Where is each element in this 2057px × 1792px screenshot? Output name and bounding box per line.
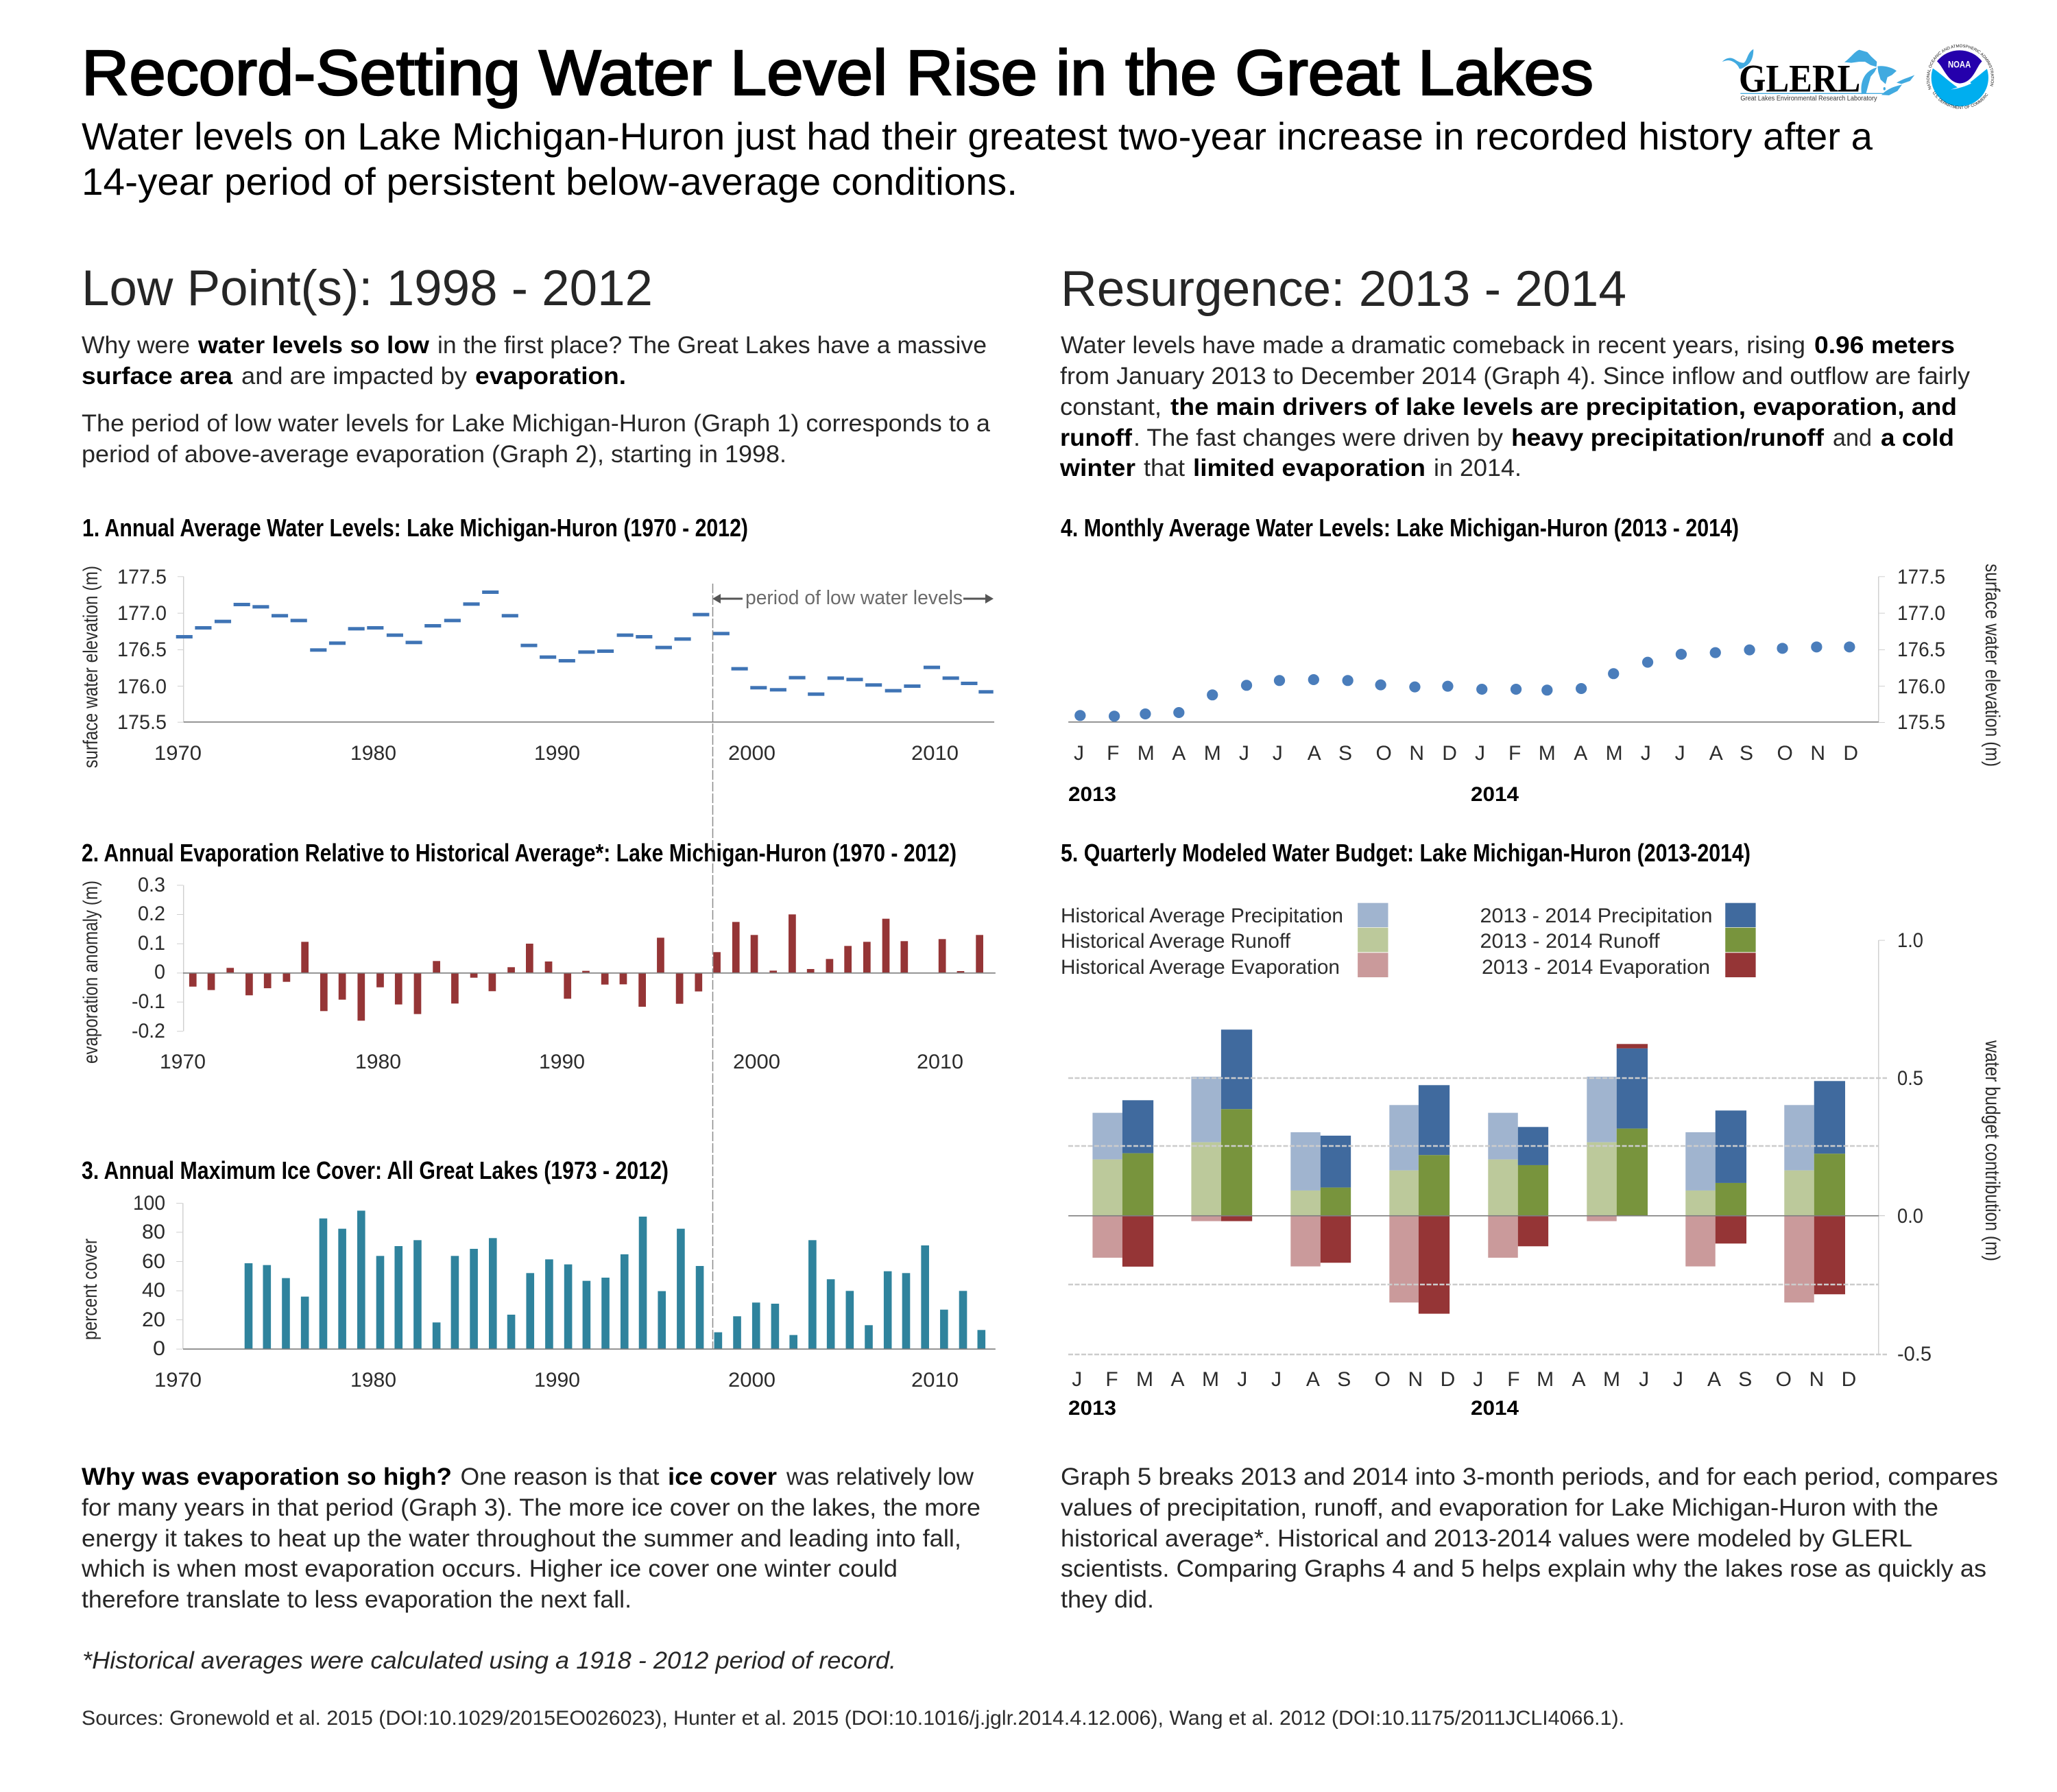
month labels 4: N xyxy=(1409,742,1424,765)
y axis labels 5: 0.5 xyxy=(1897,1067,1923,1090)
y axis labels 2: 0.2 xyxy=(138,903,165,925)
y axis labels 3: 40 xyxy=(142,1279,165,1302)
legend: 2013 - 2014 Precipitation xyxy=(1480,905,1713,927)
text block: why so low: and are impacted by xyxy=(241,363,468,390)
chart title 2: 2. Annual Evaporation Relative to Historical Average*: Lake Michigan-Huron (1970 - 2012) xyxy=(82,839,957,867)
legend: Historical Average Precipitation xyxy=(1061,905,1343,927)
x axis labels 2: 2010 xyxy=(917,1051,963,1073)
plot 2: evaporation bars xyxy=(177,885,996,1031)
chart 1: annual average water levels xyxy=(80,514,994,768)
month labels 4: A xyxy=(1709,742,1723,765)
y axis labels 5: 1.0 xyxy=(1897,929,1923,952)
y axis labels 3 xyxy=(133,1192,165,1360)
y axis title 1: surface water elevation (m) xyxy=(80,566,102,768)
panel: resurgence introduction xyxy=(1059,261,1971,481)
y axis labels 1: 175.5 xyxy=(117,711,167,734)
legend: Historical Average Runoff xyxy=(1061,930,1291,953)
month labels 4: J xyxy=(1239,742,1249,765)
month labels 5: N xyxy=(1809,1368,1824,1391)
text block: resurgence explanation: Water levels have made a dramatic comeback in recent years, rising xyxy=(1061,332,1805,359)
x axis labels 3: 1980 xyxy=(350,1369,396,1391)
month labels 4: A xyxy=(1574,742,1587,765)
reference line: 1998 xyxy=(712,584,713,1350)
x axis labels 2: 1980 xyxy=(355,1051,401,1073)
x axis labels 1: 2000 xyxy=(728,742,775,765)
month labels 5: N xyxy=(1408,1368,1423,1391)
text block: period of low water: The period of low water levels for Lake Michigan-Huron (Graph 1) corresponds to a xyxy=(82,410,991,437)
year labels 4: 2014 xyxy=(1471,783,1519,806)
y axis labels 2: 0 xyxy=(154,961,165,983)
plot 4: monthly dots xyxy=(1068,576,1885,723)
chart 2: annual evaporation anomaly xyxy=(80,839,996,1073)
text block: why was evaporation so high: Why was evaporation so high? xyxy=(82,1464,452,1490)
text block: resurgence explanation: runoff xyxy=(1060,425,1132,451)
month labels 4: S xyxy=(1338,742,1352,765)
y axis labels 2: 0.1 xyxy=(138,932,165,955)
plot 1: dash markers xyxy=(176,576,994,723)
sources: Sources: Gronewold et al. 2015 (DOI:10.1029/2015EO026023), Hunter et al. 2015 (DOI:10.1016/j.jglr.2014.4.12.006), Wang et al. 2012 (DOI:10.1175/2011JCLI4066.1). xyxy=(82,1707,1624,1730)
month labels 5: D xyxy=(1441,1368,1455,1391)
month labels 4: O xyxy=(1376,742,1392,765)
icon: NOAA logo: U.S. DEPARTMENT OF COMMERCE xyxy=(1933,91,1988,109)
subtitle: 14-year period of persistent below-average conditions. xyxy=(82,160,1018,203)
y axis labels 1: 176.0 xyxy=(117,676,167,698)
text block: resurgence explanation: constant, xyxy=(1060,394,1162,420)
month labels 4: M xyxy=(1204,742,1221,765)
chart 5: quarterly modeled water budget xyxy=(1061,839,2004,1420)
month labels 4: S xyxy=(1740,742,1753,765)
y axis labels 2: -0.2 xyxy=(132,1020,165,1042)
month labels 4: J xyxy=(1074,742,1084,765)
x axis labels 1: 2010 xyxy=(911,742,959,765)
plot 3: ice cover bars xyxy=(176,1203,996,1350)
heading: low point: Low Point(s): 1998 - 2012 xyxy=(82,261,653,316)
text block: graph 5 explanation: Graph 5 breaks 2013 and 2014 into 3-month periods, and for each period, compares xyxy=(1061,1464,1998,1490)
year labels 5: 2014 xyxy=(1471,1397,1519,1420)
month labels 5: J xyxy=(1639,1368,1649,1391)
month labels 4: J xyxy=(1641,742,1651,765)
month labels 5: F xyxy=(1507,1368,1520,1391)
callout: period of low water levels: period of low water levels xyxy=(745,587,963,609)
month labels 4: A xyxy=(1172,742,1186,765)
icon: GLERL logo: Great Lakes Environmental Research Laboratory xyxy=(1740,95,1877,103)
subtitle: Water levels on Lake Michigan-Huron just had their greatest two-year increase in recorded history after a xyxy=(82,115,1873,158)
month labels 4: M xyxy=(1138,742,1155,765)
y axis labels 3: 0 xyxy=(153,1337,165,1360)
subtitle xyxy=(82,115,1873,203)
x axis labels 2: 1990 xyxy=(539,1051,585,1073)
month labels 4: D xyxy=(1843,742,1858,765)
y axis labels 5: 0.0 xyxy=(1897,1205,1923,1228)
month labels 4: M xyxy=(1539,742,1556,765)
year labels 5: 2013 xyxy=(1068,1397,1116,1420)
chart 4: monthly average water levels xyxy=(1061,514,2004,806)
month labels 4: J xyxy=(1273,742,1283,765)
month labels 5: F xyxy=(1105,1368,1118,1391)
y axis labels 4: 176.5 xyxy=(1897,638,1945,661)
text block: why was evaporation so high: energy it takes to heat up the water throughout the summer and leading into fall, xyxy=(82,1525,961,1552)
x axis labels 2: 2000 xyxy=(733,1051,780,1073)
year labels 4: 2013 xyxy=(1068,783,1116,806)
text block: period of low water xyxy=(82,410,991,468)
gridlines xyxy=(1068,1078,1887,1354)
x axis labels 1: 1970 xyxy=(154,742,202,765)
y axis labels 4 xyxy=(1897,566,1945,734)
month labels 4: O xyxy=(1777,742,1793,765)
y axis labels 5 xyxy=(1897,929,1932,1365)
text block: why so low: surface area xyxy=(82,363,233,390)
text block: resurgence explanation: . The fast changes were driven by xyxy=(1133,425,1503,451)
y axis labels 1: 177.0 xyxy=(117,602,167,625)
y axis title 3: percent cover xyxy=(79,1239,101,1340)
footnote: *Historical averages were calculated using a 1918 - 2012 period of record. xyxy=(82,1647,896,1674)
month labels 5: J xyxy=(1473,1368,1483,1391)
y axis labels 2 xyxy=(132,874,165,1042)
y axis labels 4: 177.0 xyxy=(1897,602,1945,625)
month labels 5: M xyxy=(1603,1368,1620,1391)
text block: resurgence explanation xyxy=(1059,332,1971,481)
x axis labels 1: 1980 xyxy=(350,742,396,765)
y axis labels 4: 175.5 xyxy=(1897,711,1945,734)
x axis labels 3 xyxy=(154,1369,959,1391)
y axis labels 3: 20 xyxy=(142,1309,165,1331)
y axis labels 5: -0.5 xyxy=(1897,1343,1932,1365)
month labels 4 xyxy=(1074,742,1858,765)
legend: 2013 - 2014 Evaporation xyxy=(1482,956,1710,979)
y axis labels 3: 100 xyxy=(133,1192,165,1215)
chart title 5: 5. Quarterly Modeled Water Budget: Lake Michigan-Huron (2013-2014) xyxy=(1061,839,1751,867)
text block: graph 5 explanation: historical average*. Historical and 2013-2014 values were modeled by GLERL xyxy=(1061,1525,1912,1552)
legend xyxy=(1061,903,1756,979)
text block: why was evaporation so high: was relatively low xyxy=(786,1464,974,1490)
year labels 5 xyxy=(1068,1397,1519,1420)
text block: why so low: in the first place? The Great Lakes have a massive xyxy=(437,332,987,359)
panel: header xyxy=(82,37,1873,203)
y axis labels 2: 0.3 xyxy=(138,874,165,896)
month labels 5: A xyxy=(1707,1368,1721,1391)
month labels 5 xyxy=(1072,1368,1856,1391)
month labels 5: A xyxy=(1306,1368,1320,1391)
text block: why was evaporation so high xyxy=(81,1464,981,1613)
month labels 5: M xyxy=(1136,1368,1153,1391)
text block: why was evaporation so high: which is when most evaporation occurs. Higher ice cover one winter could xyxy=(81,1555,898,1582)
text block: why was evaporation so high: therefore translate to less evaporation the next fall. xyxy=(82,1586,631,1613)
text block: resurgence explanation: 0.96 meters xyxy=(1814,332,1955,359)
month labels 5: S xyxy=(1738,1368,1752,1391)
text block: resurgence explanation: the main drivers of lake levels are precipitation, evaporation, and xyxy=(1170,394,1957,420)
month labels 5: J xyxy=(1673,1368,1683,1391)
month labels 5: M xyxy=(1537,1368,1554,1391)
x axis labels 1: 1990 xyxy=(534,742,580,765)
chart title 4: 4. Monthly Average Water Levels: Lake Michigan-Huron (2013 - 2014) xyxy=(1061,514,1739,542)
month labels 5: O xyxy=(1375,1368,1391,1391)
text block: why so low xyxy=(82,332,987,390)
month labels 4: F xyxy=(1107,742,1119,765)
heading: resurgence: Resurgence: 2013 - 2014 xyxy=(1061,261,1626,317)
y axis title 4: surface water elevation (m) xyxy=(1981,564,2004,767)
text block: graph 5 explanation: values of precipitation, runoff, and evaporation for Lake Michigan-Huron with the xyxy=(1061,1494,1938,1521)
icon: NOAA logo xyxy=(1927,44,1994,109)
legend: Historical Average Evaporation xyxy=(1061,956,1340,979)
month labels 5: J xyxy=(1271,1368,1282,1391)
month labels 5: O xyxy=(1776,1368,1792,1391)
text block: resurgence explanation: and xyxy=(1833,425,1872,451)
y axis labels 4: 177.5 xyxy=(1897,566,1945,588)
text block: why was evaporation so high: ice cover xyxy=(668,1464,777,1490)
text block: why was evaporation so high: for many years in that period (Graph 3). The more ice cover on the lakes, the more xyxy=(82,1494,981,1521)
plot 5: stacked bars xyxy=(1068,940,1885,1354)
x axis labels 2: 1970 xyxy=(160,1051,206,1073)
y axis title 2: evaporation anomaly (m) xyxy=(80,881,102,1064)
chart title 3: 3. Annual Maximum Ice Cover: All Great Lakes (1973 - 2012) xyxy=(82,1156,669,1184)
text block: why was evaporation so high: One reason is that xyxy=(461,1464,660,1490)
text block: graph 5 explanation: they did. xyxy=(1061,1586,1154,1613)
chart title 1: 1. Annual Average Water Levels: Lake Michigan-Huron (1970 - 2012) xyxy=(82,514,748,542)
text block: resurgence explanation: that xyxy=(1144,455,1185,481)
month labels 5: A xyxy=(1572,1368,1586,1391)
text block: resurgence explanation: winter xyxy=(1059,455,1135,481)
month labels 4: M xyxy=(1606,742,1623,765)
y axis labels 4: 176.0 xyxy=(1897,676,1945,698)
text block: why so low: evaporation. xyxy=(475,363,626,390)
month labels 5: J xyxy=(1072,1368,1082,1391)
month labels 4: F xyxy=(1508,742,1521,765)
text block: why so low: water levels so low xyxy=(197,332,430,359)
y axis labels 1: 176.5 xyxy=(117,638,167,661)
month labels 4: N xyxy=(1810,742,1825,765)
panel: low point introduction xyxy=(82,261,991,468)
month labels 5: A xyxy=(1170,1368,1185,1391)
chart 3: annual maximum ice cover xyxy=(79,1156,996,1391)
text block: resurgence explanation: in 2014. xyxy=(1434,455,1521,481)
text block: resurgence explanation: a cold xyxy=(1881,425,1954,451)
x axis labels 3: 1970 xyxy=(154,1369,202,1391)
y axis labels 2: -0.1 xyxy=(132,990,165,1013)
y axis labels 1 xyxy=(117,566,167,734)
x axis labels 1 xyxy=(154,742,959,765)
text block: resurgence explanation: heavy precipitation/runoff xyxy=(1511,425,1824,451)
year labels 4 xyxy=(1068,783,1519,806)
y axis labels 1: 177.5 xyxy=(117,566,167,588)
text block: why so low: Why were xyxy=(82,332,190,359)
icon: NOAA logo: NATIONAL OCEANIC AND ATMOSPHERIC ADMINISTRATION xyxy=(1927,44,1994,90)
month labels 5: D xyxy=(1842,1368,1856,1391)
x axis labels 3: 2000 xyxy=(728,1369,775,1391)
text block: graph 5 explanation xyxy=(1061,1464,1998,1613)
icon: NOAA logo: NOAA xyxy=(1948,58,1971,69)
month labels 4: J xyxy=(1675,742,1685,765)
title: Record-Setting Water Level Rise in the Great Lakes xyxy=(82,37,1593,108)
text block: resurgence explanation: from January 2013 to December 2014 (Graph 4). Since inflow and outflow are fairly xyxy=(1060,363,1971,390)
month labels 4: J xyxy=(1475,742,1485,765)
month labels 5: J xyxy=(1237,1368,1247,1391)
icon: GLERL logo xyxy=(1722,49,1914,103)
y axis labels 3: 60 xyxy=(142,1250,165,1273)
icon: GLERL logo: GLERL xyxy=(1739,57,1860,100)
text block: resurgence explanation: limited evaporation xyxy=(1193,455,1426,481)
y axis title 5: water budget contribution (m) xyxy=(1981,1040,2004,1261)
month labels 4: D xyxy=(1442,742,1457,765)
month labels 4: A xyxy=(1308,742,1321,765)
text block: period of low water: period of above-average evaporation (Graph 2), starting in 1998. xyxy=(82,441,786,468)
x axis labels 3: 2010 xyxy=(911,1369,959,1391)
month labels 5: S xyxy=(1337,1368,1351,1391)
y axis labels 3: 80 xyxy=(142,1221,165,1243)
x axis labels 2 xyxy=(160,1051,963,1073)
legend: 2013 - 2014 Runoff xyxy=(1480,930,1660,953)
x axis labels 3: 1990 xyxy=(534,1369,580,1391)
text block: graph 5 explanation: scientists. Comparing Graphs 4 and 5 helps explain why the lakes rose as quickly as xyxy=(1061,1555,1986,1582)
month labels 5: M xyxy=(1202,1368,1219,1391)
